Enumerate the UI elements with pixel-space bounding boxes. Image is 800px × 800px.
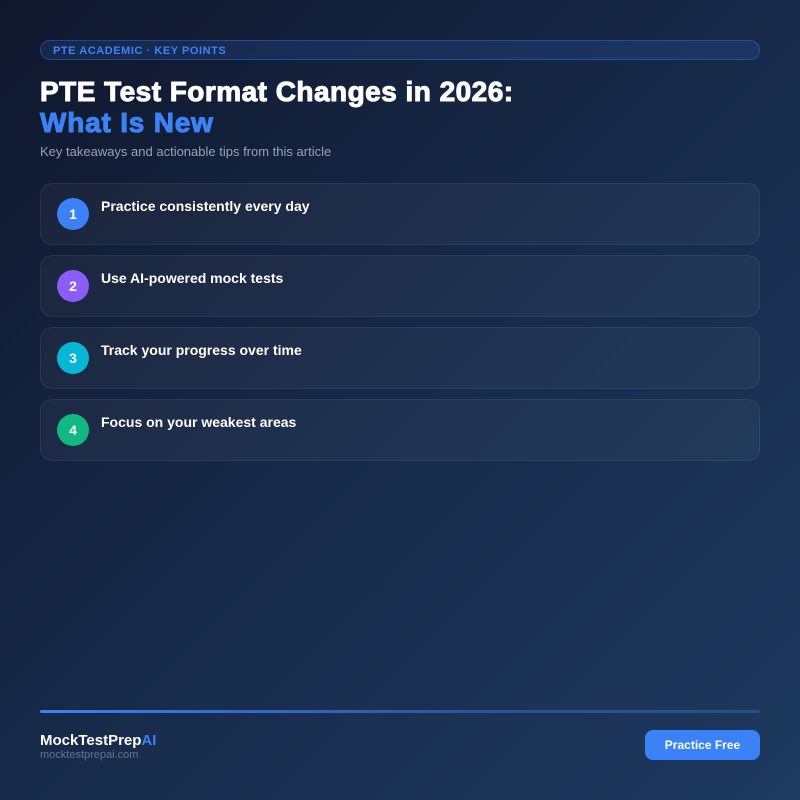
list of key points bbox=[40, 183, 760, 461]
card: point 1 bbox=[40, 183, 760, 245]
badge: category pill: PTE ACADEMIC · KEY POINTS bbox=[53, 45, 226, 57]
card: point 2: 2 bbox=[69, 278, 77, 294]
brand block bbox=[40, 732, 156, 761]
brand url: mocktestprepai.com bbox=[40, 749, 138, 761]
card: point 4 bbox=[40, 399, 760, 461]
badge: category pill bbox=[40, 40, 760, 60]
card: point 3 bbox=[40, 327, 760, 389]
card: point 1: Practice consistently every day bbox=[101, 198, 310, 214]
card: point 4: Focus on your weakest areas bbox=[101, 414, 296, 430]
title: What Is New bbox=[40, 107, 214, 138]
card: point 2 bbox=[40, 255, 760, 317]
subtitle: Key takeaways and actionable tips from this article bbox=[40, 144, 331, 159]
call to action button bbox=[645, 730, 760, 760]
card: point 1: 1 bbox=[69, 206, 77, 222]
call to action button: Practice Free bbox=[665, 738, 740, 752]
title bbox=[39, 76, 514, 138]
title: PTE Test Format Changes in 2026: bbox=[40, 76, 514, 107]
footer accent line bbox=[40, 710, 760, 713]
card: point 2: Use AI-powered mock tests bbox=[101, 270, 283, 286]
card: point 3: Track your progress over time bbox=[101, 342, 302, 358]
brand name: MockTestPrepAI bbox=[40, 732, 156, 749]
card: point 4: 4 bbox=[69, 422, 77, 438]
card: point 3: 3 bbox=[69, 350, 77, 366]
